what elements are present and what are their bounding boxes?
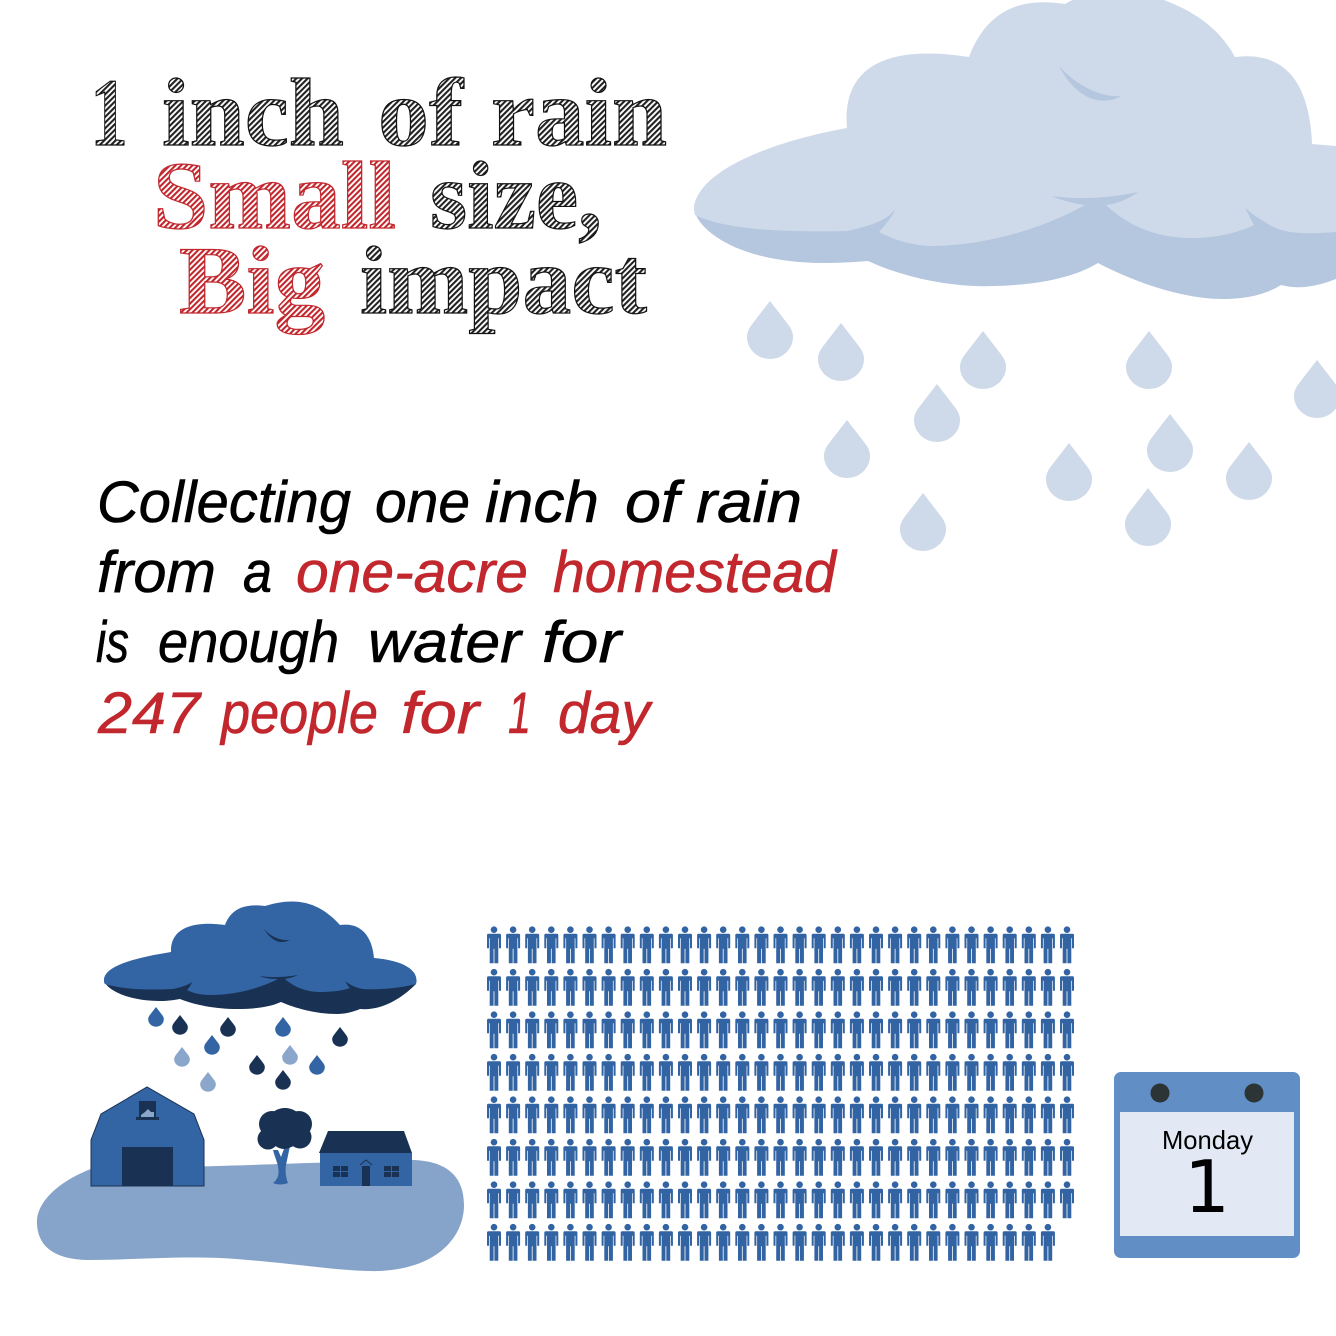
handwritten statement: enough <box>158 610 339 675</box>
handwritten statement: 1 <box>508 681 531 746</box>
handwritten statement: 247 <box>97 681 203 746</box>
handwritten statement: water <box>368 610 524 675</box>
title: rain <box>491 59 667 166</box>
handwritten statement: homestead <box>553 540 838 605</box>
cloud crease <box>1059 66 1121 101</box>
small cloud crease <box>264 929 290 942</box>
calendar day: Monday <box>1162 1125 1253 1155</box>
handwritten statement: a <box>243 540 272 605</box>
handwritten statement: for <box>401 681 482 746</box>
handwritten statement <box>96 470 838 746</box>
homestead illustration <box>37 901 464 1271</box>
handwritten statement: for <box>542 610 624 675</box>
title <box>90 59 667 334</box>
ground <box>37 1160 464 1271</box>
title: size, <box>430 142 602 249</box>
title: 1 <box>90 59 128 166</box>
house <box>319 1131 412 1186</box>
small rain cloud <box>104 901 417 1014</box>
title: of <box>378 59 464 166</box>
handwritten statement: of <box>625 470 686 535</box>
tree <box>258 1108 312 1184</box>
pictogram: 247 people <box>487 926 1074 1261</box>
handwritten statement: is <box>96 610 129 675</box>
calendar date: 1 <box>1184 1145 1230 1229</box>
handwritten statement: one <box>375 470 470 535</box>
handwritten statement: one-acre <box>296 540 528 605</box>
handwritten statement: inch <box>485 470 599 535</box>
handwritten statement: Collecting <box>97 470 351 535</box>
handwritten statement: rain <box>696 470 802 535</box>
calendar <box>1114 1072 1300 1258</box>
barn <box>91 1087 204 1186</box>
large raindrops <box>747 301 1336 551</box>
title: inch <box>162 59 344 166</box>
title: Big <box>179 227 325 334</box>
title: impact <box>360 227 647 334</box>
title: Small <box>153 142 396 249</box>
handwritten statement: people <box>219 681 378 746</box>
handwritten statement: from <box>97 540 216 605</box>
small raindrops <box>148 1007 348 1092</box>
handwritten statement: day <box>558 681 653 746</box>
large rain cloud <box>694 0 1336 299</box>
